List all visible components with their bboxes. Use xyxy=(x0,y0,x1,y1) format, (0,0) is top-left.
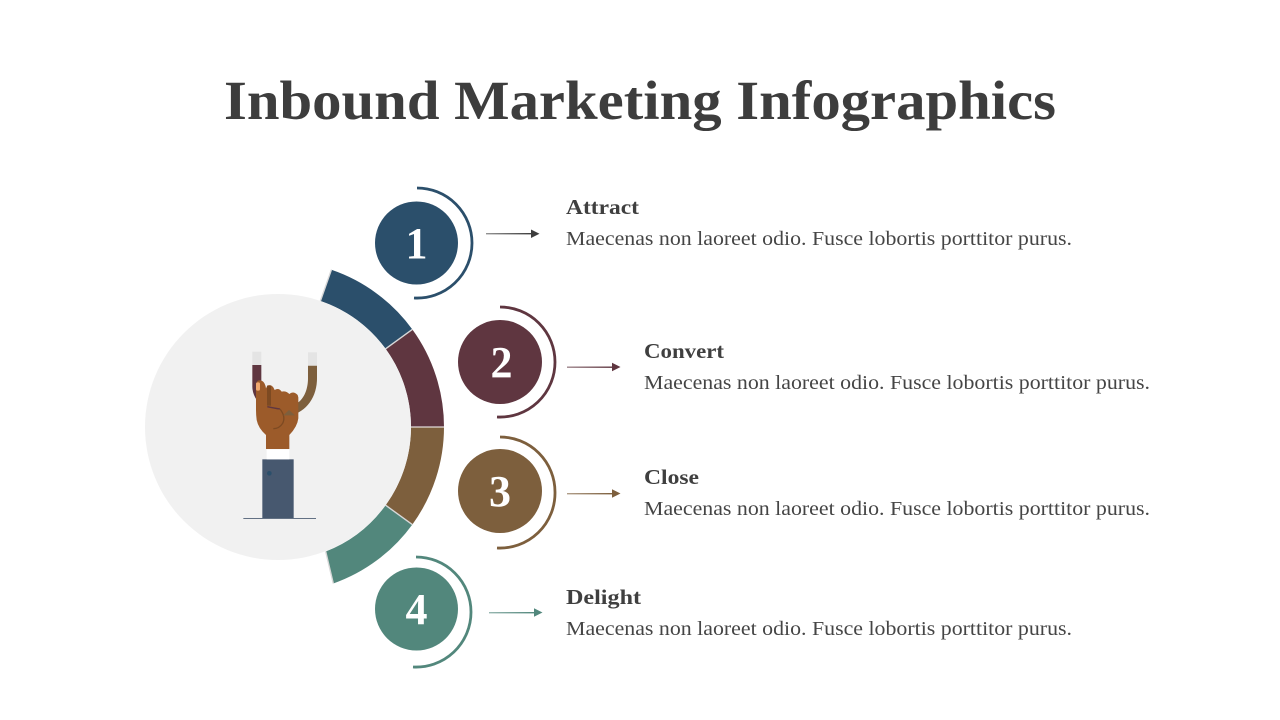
central circle xyxy=(145,294,411,560)
arrow 1 xyxy=(486,230,540,238)
left magnet arm xyxy=(252,365,261,400)
ring segment 3 xyxy=(386,427,444,525)
number badge 2 xyxy=(458,320,542,404)
step 2 xyxy=(458,307,1150,417)
number badge 1 xyxy=(375,202,458,284)
arc 1 xyxy=(414,188,472,298)
description 2: Maecenas non laoreet odio. Fusce lobortis porttitor purus. xyxy=(644,372,1150,394)
arrow 4 xyxy=(489,608,542,617)
step 4 xyxy=(375,557,1072,667)
numeral 3: 3 xyxy=(489,467,511,516)
fingernail xyxy=(256,382,260,391)
segmented ring xyxy=(320,270,444,584)
arc 3 xyxy=(497,437,555,548)
number badge 3 xyxy=(458,449,542,533)
description 4: Maecenas non laoreet odio. Fusce lobortis porttitor purus. xyxy=(566,618,1072,640)
heading: Delight: Delight xyxy=(566,585,641,609)
arrow 2 xyxy=(567,363,620,371)
heading: Close: Close xyxy=(644,465,699,489)
number badge 4 xyxy=(375,568,458,650)
step 1 xyxy=(375,188,1072,298)
arc 2 xyxy=(497,307,555,417)
finger crease xyxy=(267,386,271,406)
heading: Convert: Convert xyxy=(644,339,724,363)
description 1: Maecenas non laoreet odio. Fusce lobortis porttitor purus. xyxy=(566,228,1072,250)
description 3: Maecenas non laoreet odio. Fusce lobortis porttitor purus. xyxy=(644,498,1150,520)
numeral 2: 2 xyxy=(490,338,512,387)
palm magnet detail xyxy=(267,407,280,409)
sleeve xyxy=(262,459,294,518)
arrow 3 xyxy=(567,489,620,498)
title: Inbound Marketing Infographics xyxy=(224,70,1056,131)
fist xyxy=(256,380,298,449)
arc 4 xyxy=(413,557,471,667)
numeral 1: 1 xyxy=(406,219,428,268)
ring segment 4 xyxy=(326,505,412,584)
ring segment 2 xyxy=(386,329,444,427)
numeral 4: 4 xyxy=(406,585,428,634)
heading: Attract: Attract xyxy=(566,195,639,219)
right magnet arm xyxy=(285,366,317,416)
cuff xyxy=(267,449,289,459)
icon: hand making rock sign with magnet xyxy=(243,352,317,519)
step 3 xyxy=(458,437,1150,548)
ring segment 1 xyxy=(320,270,412,349)
